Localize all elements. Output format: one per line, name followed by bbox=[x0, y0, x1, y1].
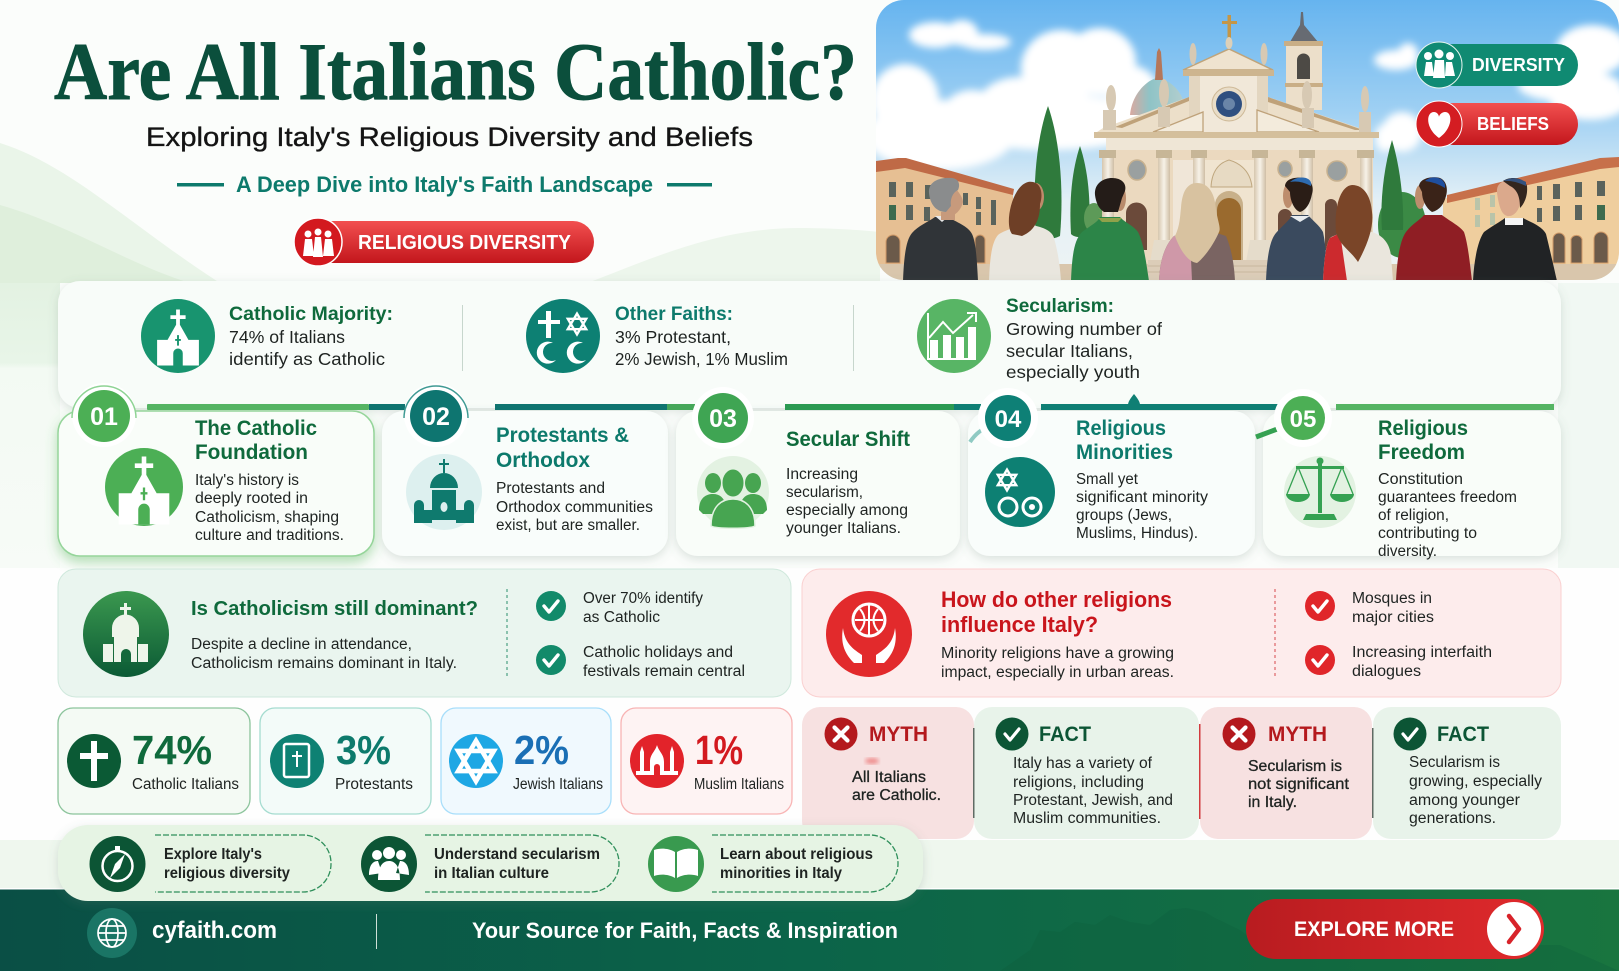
stat card: 2% Jewish bbox=[441, 708, 611, 814]
step 01 bbox=[72, 383, 136, 447]
panel: How do other religions influence Italy?: major cities bbox=[1352, 609, 1434, 626]
fact 1 bbox=[974, 707, 1199, 839]
dome bbox=[1130, 78, 1186, 115]
myth 1: MYTH bbox=[869, 723, 928, 746]
panel: Is Catholicism still dominant?: festivals remain central bbox=[583, 663, 745, 680]
card 5: Religious Freedom bbox=[1263, 411, 1561, 560]
card 1: The Catholic Foundation: deeply rooted in bbox=[195, 490, 308, 507]
card 5: Religious Freedom: Religious bbox=[1378, 417, 1468, 440]
card 2: Protestants and Orthodox: exist, but are smaller. bbox=[496, 517, 640, 534]
stat card: 74% Catholic: 74% bbox=[132, 727, 212, 773]
card 4: Religious Minorities: groups (Jews, bbox=[1076, 507, 1172, 524]
fact: secularism: Secularism: bbox=[1006, 296, 1114, 317]
steps bbox=[1148, 260, 1268, 280]
action: understand secularism: Understand secularism bbox=[434, 846, 600, 863]
card 5: Religious Freedom: guarantees freedom bbox=[1378, 489, 1517, 506]
panel: Is Catholicism still dominant?: Is Catholicism still dominant? bbox=[191, 597, 478, 620]
action: learn about minorities bbox=[648, 835, 898, 892]
person white blouse bbox=[989, 225, 1061, 281]
myth 2: in Italy. bbox=[1248, 794, 1297, 811]
card 1: The Catholic Foundation: The Catholic bbox=[195, 417, 317, 440]
panel: How do other religions influence Italy?: Increasing interfaith bbox=[1352, 644, 1492, 661]
fact 2: growing, especially bbox=[1409, 773, 1542, 790]
panel: How do other religions influence Italy?: dialogues bbox=[1352, 663, 1421, 680]
fact 1: Protestant, Jewish, and bbox=[1013, 792, 1173, 809]
card 5: Religious Freedom: contributing to bbox=[1378, 525, 1477, 542]
card 2: Protestants and Orthodox: Orthodox communities bbox=[496, 499, 653, 516]
priest bbox=[1473, 218, 1557, 281]
card 4: Religious Minorities: Small yet bbox=[1076, 471, 1139, 488]
hero illustration: church and people bbox=[865, 0, 1619, 282]
action: understand secularism bbox=[361, 835, 619, 892]
trees bbox=[1034, 106, 1426, 258]
myth 2: Secularism is bbox=[1248, 758, 1342, 775]
myth 1: All Italians bbox=[852, 769, 926, 786]
fact 1: Italy has a variety of bbox=[1013, 755, 1153, 772]
stat card: 2% Jewish: 2% bbox=[514, 727, 569, 773]
stat card: 74% Catholic: Catholic Italians bbox=[132, 776, 239, 793]
panel: key facts bbox=[58, 281, 1561, 408]
step 04: 04 bbox=[995, 406, 1022, 433]
person headscarf bbox=[1159, 232, 1235, 281]
card 2: Protestants and Orthodox bbox=[382, 411, 668, 556]
silhouette of town bbox=[1000, 908, 1619, 971]
badge: diversity bbox=[1416, 42, 1578, 88]
card 5: Religious Freedom: Freedom bbox=[1378, 441, 1465, 464]
card 3: Secular Shift: especially among bbox=[786, 502, 908, 519]
person grey suit bbox=[903, 217, 978, 281]
fact: secularism: secular Italians, bbox=[1006, 341, 1133, 361]
card 2: Protestants and Orthodox: Orthodox bbox=[496, 449, 590, 472]
action: explore diversity: Explore Italy's bbox=[164, 846, 262, 863]
button: explore more: EXPLORE MORE bbox=[1294, 918, 1454, 941]
card 3: Secular Shift bbox=[676, 411, 960, 556]
statues bbox=[1103, 43, 1371, 132]
person green jacket bbox=[1071, 217, 1149, 281]
panel: How do other religions influence Italy?: Minority religions have a growing bbox=[941, 645, 1174, 662]
fact: Catholic majority: Catholic Majority: bbox=[229, 304, 393, 325]
person navy suit bbox=[1266, 215, 1328, 281]
fact: secularism: Growing number of bbox=[1006, 319, 1162, 339]
panel: How do other religions influence Italy?: impact, especially in urban areas. bbox=[941, 664, 1174, 681]
panel: Is Catholicism still dominant?: Catholicism remains dominant in Italy. bbox=[191, 655, 457, 672]
tagline with side rules: A Deep Dive into Italy's Faith Landscape bbox=[236, 172, 653, 197]
site name with globe: cyfaith.com bbox=[152, 917, 277, 944]
step 02: 02 bbox=[422, 403, 450, 431]
fact 2 bbox=[1373, 707, 1561, 839]
strip: things to explore bbox=[58, 825, 923, 901]
buildings bbox=[876, 162, 1013, 268]
panel: Is Catholicism still dominant?: as Catholic bbox=[583, 609, 660, 626]
fact: secularism bbox=[917, 296, 1162, 382]
myth 1: are Catholic. bbox=[852, 787, 941, 804]
panel: Is Catholicism still dominant?: Catholic holidays and bbox=[583, 644, 733, 661]
stat card: 74% Catholic bbox=[58, 708, 250, 814]
panel: Is Catholicism still dominant?: Over 70% identify bbox=[583, 590, 703, 607]
panel: Is Catholicism still dominant? bbox=[58, 569, 791, 697]
badge: beliefs bbox=[1416, 101, 1578, 147]
card 4: Religious Minorities: Minorities bbox=[1076, 441, 1173, 464]
people bbox=[903, 177, 1557, 281]
step 03 bbox=[692, 387, 754, 449]
card 2: Protestants and Orthodox: Protestants and bbox=[496, 480, 605, 497]
badge: diversity: DIVERSITY bbox=[1472, 55, 1565, 75]
card 3: Secular Shift: Secular Shift bbox=[786, 428, 910, 451]
myth 2: MYTH bbox=[1268, 723, 1327, 746]
action: learn about minorities: Learn about religious bbox=[720, 846, 873, 863]
card 3: Secular Shift: secularism, bbox=[786, 484, 863, 501]
card 1: The Catholic Foundation: Foundation bbox=[195, 441, 308, 464]
card 5: Religious Freedom: Constitution bbox=[1378, 471, 1463, 488]
fact 1: FACT bbox=[1039, 723, 1091, 746]
fact: other faiths: 3% Protestant, bbox=[615, 327, 731, 347]
timeline bar with numbered steps bbox=[72, 383, 1554, 449]
fact: Catholic majority: 74% of Italians bbox=[229, 327, 345, 347]
step 04 bbox=[970, 388, 1038, 448]
panel: How do other religions influence Italy?: influence Italy? bbox=[941, 612, 1098, 637]
card 1: The Catholic Foundation bbox=[58, 411, 374, 556]
person long hair bbox=[1323, 231, 1393, 281]
action: explore diversity: religious diversity bbox=[164, 865, 290, 882]
fact: other faiths: Other Faiths: bbox=[615, 304, 733, 325]
footer band bbox=[0, 888, 1619, 971]
badge: religious diversity bbox=[294, 218, 594, 266]
badge: beliefs: BELIEFS bbox=[1477, 114, 1549, 134]
fact 2: Secularism is bbox=[1409, 754, 1500, 771]
bell tower bbox=[1286, 44, 1322, 110]
panel: Is Catholicism still dominant?: Despite a decline in attendance, bbox=[191, 636, 412, 653]
title: Are All Italians Catholic? bbox=[54, 26, 857, 117]
fact 2: among younger bbox=[1409, 792, 1520, 809]
facade bbox=[1097, 97, 1359, 132]
fact: other faiths bbox=[526, 299, 788, 373]
fact 1: Muslim communities. bbox=[1013, 810, 1161, 827]
card 4: Religious Minorities: Muslims, Hindus). bbox=[1076, 525, 1198, 542]
card 5: Religious Freedom: of religion, bbox=[1378, 507, 1449, 524]
stat card: 1% Muslim bbox=[621, 708, 792, 814]
action: learn about minorities: minorities in Italy bbox=[720, 865, 842, 882]
fact 1: religions, including bbox=[1013, 774, 1144, 791]
card 1: The Catholic Foundation: Italy's history is bbox=[195, 472, 299, 489]
subtitle: Exploring Italy's Religious Diversity and Beliefs bbox=[146, 122, 753, 152]
fact 2: generations. bbox=[1409, 810, 1496, 827]
action: explore diversity bbox=[90, 835, 331, 892]
panel: How do other religions influence Italy? bbox=[802, 569, 1561, 697]
fact: secularism: especially youth bbox=[1006, 362, 1140, 382]
card 1: The Catholic Foundation: Catholicism, shaping bbox=[195, 509, 339, 526]
card 3: Secular Shift: younger Italians. bbox=[786, 520, 901, 537]
card 4: Religious Minorities: Religious bbox=[1076, 417, 1166, 440]
step 05: 05 bbox=[1290, 406, 1316, 433]
action: understand secularism: in Italian culture bbox=[434, 865, 549, 882]
panel: How do other religions influence Italy?: How do other religions bbox=[941, 587, 1172, 612]
stat card: 3% Protestants: 3% bbox=[336, 727, 391, 773]
fact: other faiths: 2% Jewish, 1% Muslim bbox=[615, 349, 788, 369]
site name with globe bbox=[87, 908, 277, 958]
fact: Catholic majority bbox=[141, 299, 393, 373]
myth 2 bbox=[1200, 707, 1372, 839]
stat card: 3% Protestants: Protestants bbox=[335, 776, 413, 793]
card 4: Religious Minorities bbox=[968, 411, 1255, 556]
button: explore more bbox=[1246, 899, 1544, 959]
badge: religious diversity: RELIGIOUS DIVERSITY bbox=[358, 232, 572, 254]
card 5: Religious Freedom: diversity. bbox=[1378, 543, 1437, 560]
stat card: 1% Muslim: 1% bbox=[695, 727, 743, 773]
stat card: 1% Muslim: Muslim Italians bbox=[694, 776, 784, 793]
tagline: Your Source for Faith, Facts & Inspiration bbox=[472, 918, 898, 943]
step 02 bbox=[404, 383, 468, 447]
card 2: Protestants and Orthodox: Protestants & bbox=[496, 424, 629, 447]
myth 1 bbox=[802, 707, 974, 839]
step 05 bbox=[1256, 389, 1332, 447]
fact: Catholic majority: identify as Catholic bbox=[229, 349, 385, 369]
myth 2: not significant bbox=[1248, 776, 1350, 793]
step 01: 01 bbox=[90, 403, 118, 431]
stat card: 2% Jewish: Jewish Italians bbox=[513, 776, 603, 793]
fact 2: FACT bbox=[1437, 723, 1489, 746]
stat card: 3% Protestants bbox=[260, 708, 431, 814]
card 4: Religious Minorities: significant minority bbox=[1076, 489, 1208, 506]
step 03: 03 bbox=[709, 405, 737, 433]
card 3: Secular Shift: Increasing bbox=[786, 466, 858, 483]
person red jacket bbox=[1396, 215, 1472, 281]
panel: How do other religions influence Italy?: Mosques in bbox=[1352, 590, 1432, 607]
card 1: The Catholic Foundation: culture and traditions. bbox=[195, 527, 344, 544]
